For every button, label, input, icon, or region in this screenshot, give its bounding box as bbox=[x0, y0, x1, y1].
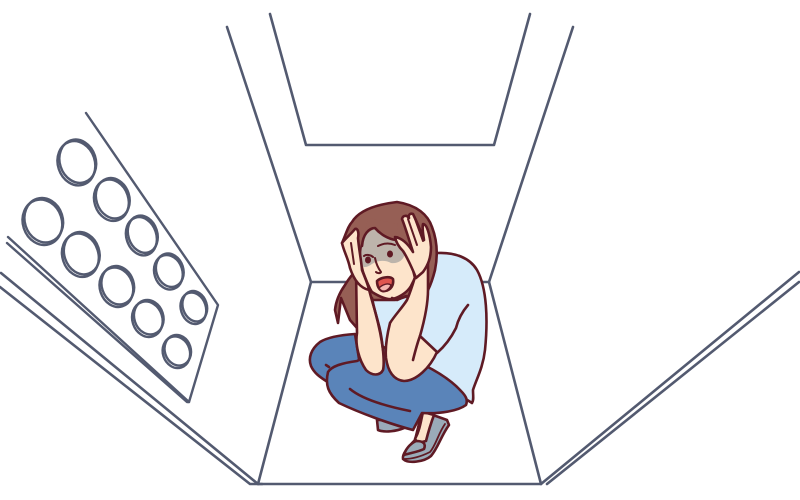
shirt bbox=[372, 253, 486, 403]
hair fringe bbox=[361, 218, 398, 246]
open mouth bbox=[377, 277, 393, 291]
sleeve fold bbox=[437, 305, 468, 353]
back shoe bbox=[377, 420, 404, 431]
chin bbox=[392, 296, 406, 300]
eyes, nose and brows bbox=[364, 244, 395, 273]
elevator button panel bbox=[7, 113, 218, 402]
left arm bbox=[356, 270, 384, 374]
woman bbox=[310, 202, 486, 462]
face bbox=[361, 235, 415, 299]
hair bbox=[335, 202, 437, 328]
front shoe bbox=[403, 415, 449, 462]
left hand bbox=[342, 229, 369, 290]
right hand bbox=[395, 214, 431, 278]
fear shadow on face bbox=[361, 229, 405, 267]
front leg bbox=[327, 345, 467, 430]
back leg bbox=[310, 334, 360, 381]
right arm bbox=[386, 263, 437, 381]
